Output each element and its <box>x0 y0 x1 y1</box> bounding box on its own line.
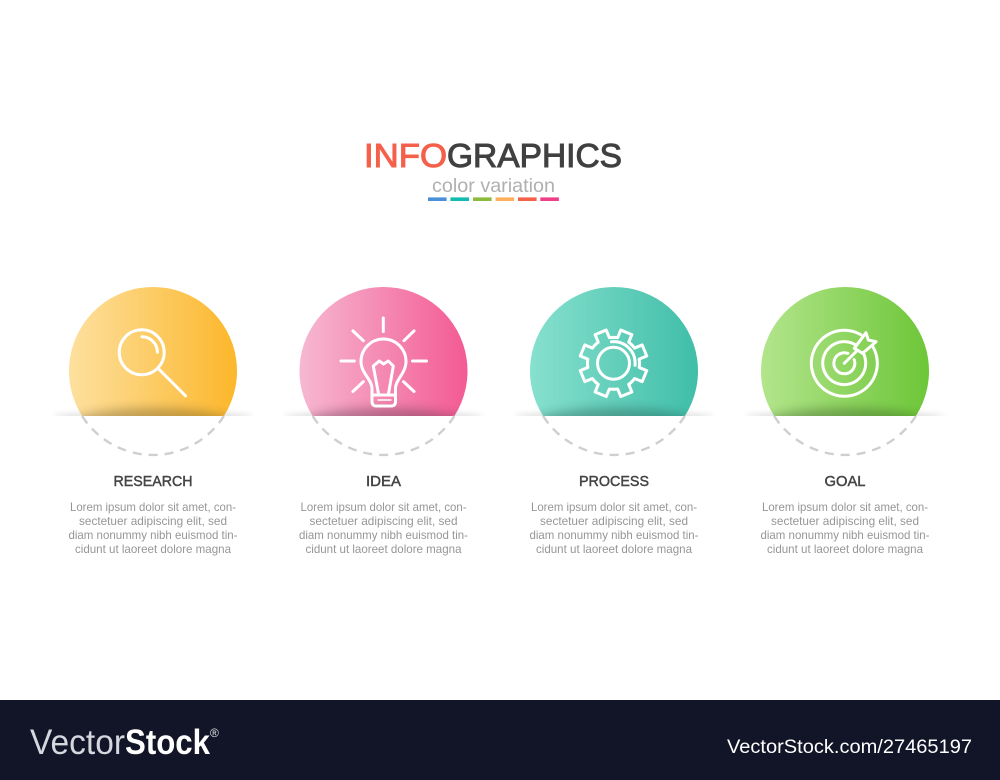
body text: Lorem ipsum dolor sit amet, con- <box>70 501 236 514</box>
colour swatches <box>428 197 559 201</box>
body text <box>299 501 468 556</box>
body text: Lorem ipsum dolor sit amet, con- <box>531 501 697 514</box>
icon: gear <box>579 329 648 398</box>
inner shadow <box>80 402 226 416</box>
body text: diam nonummy nibh euismod tin- <box>68 529 238 542</box>
panel: process <box>514 287 714 556</box>
body text: cidunt ut laoreet dolore magna <box>75 543 232 556</box>
panel: idea <box>284 287 484 556</box>
title: GRAPHICS <box>447 138 622 175</box>
ground shadow <box>57 412 249 416</box>
body text <box>760 501 930 556</box>
footer logo: ® <box>210 726 219 740</box>
inner shadow <box>541 403 687 416</box>
circle <box>69 287 237 416</box>
icon: target with arrow <box>811 330 877 396</box>
circle <box>761 287 929 416</box>
panel: goal <box>745 287 945 556</box>
body text: cidunt ut laoreet dolore magna <box>767 543 924 556</box>
body text: diam nonummy nibh euismod tin- <box>530 529 699 542</box>
heading: PROCESS <box>579 474 649 490</box>
body text: sectetuer adipiscing elit, sed <box>540 515 688 528</box>
body text: sectetuer adipiscing elit, sed <box>310 515 458 528</box>
circle <box>530 287 698 416</box>
footer image id: VectorStock.com/27465197 <box>727 736 972 758</box>
body text <box>530 501 699 556</box>
body text <box>68 501 238 556</box>
body text: Lorem ipsum dolor sit amet, con- <box>300 501 467 514</box>
body text: cidunt ut laoreet dolore magna <box>306 543 462 556</box>
heading: GOAL <box>824 474 866 490</box>
title: INFO <box>364 138 447 175</box>
footer logo: Vector <box>30 723 125 762</box>
subtitle: color variation <box>432 175 555 197</box>
footer logo: Stock <box>125 723 210 762</box>
body text: diam nonummy nibh euismod tin- <box>299 529 468 542</box>
heading: RESEARCH <box>114 474 192 490</box>
icon: light bulb <box>341 318 426 406</box>
title <box>364 138 622 175</box>
ground shadow <box>288 412 480 416</box>
footer logo <box>30 723 219 762</box>
dashed arc <box>313 416 454 455</box>
body text: cidunt ut laoreet dolore magna <box>536 543 693 556</box>
inner shadow <box>772 403 918 416</box>
footer bar <box>0 700 1000 780</box>
body text: Lorem ipsum dolor sit amet, con- <box>762 501 928 514</box>
body text: diam nonummy nibh euismod tin- <box>760 529 930 542</box>
dashed arc <box>82 416 224 455</box>
ground shadow <box>518 412 710 416</box>
inner shadow <box>310 402 457 416</box>
heading: IDEA <box>366 474 401 490</box>
ground shadow <box>749 412 941 416</box>
icon: magnifying glass <box>119 330 186 396</box>
dashed arc <box>774 416 916 455</box>
circle <box>300 287 468 416</box>
panel: research <box>53 287 253 556</box>
body text: sectetuer adipiscing elit, sed <box>771 515 919 528</box>
body text: sectetuer adipiscing elit, sed <box>79 515 227 528</box>
dashed arc <box>543 416 685 455</box>
